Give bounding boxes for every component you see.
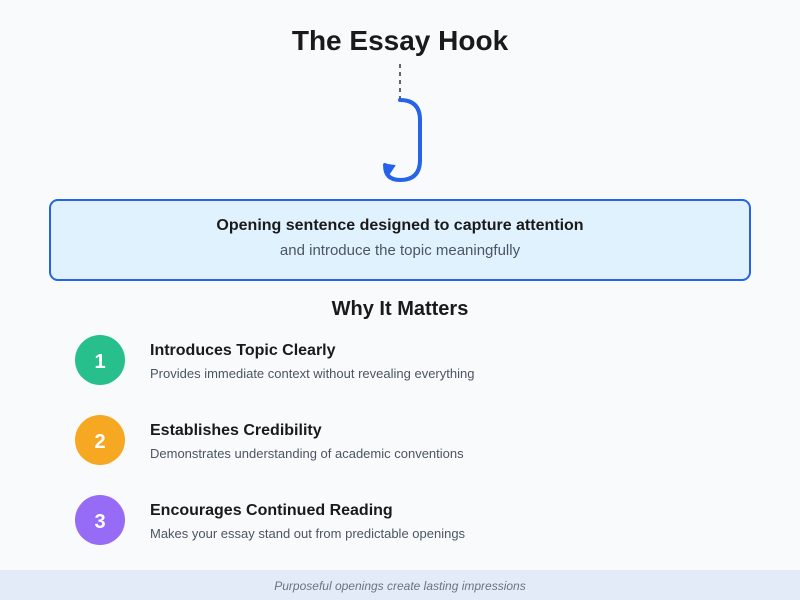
footer bbox=[0, 570, 800, 600]
item 1 description: Provides immediate context without revealing everything bbox=[150, 366, 474, 381]
item 2 description: Demonstrates understanding of academic conventions bbox=[150, 446, 464, 461]
item 1 title: Introduces Topic Clearly bbox=[150, 342, 336, 359]
item 2 title: Establishes Credibility bbox=[150, 422, 322, 439]
badge 3 bbox=[75, 495, 125, 545]
item 3 bbox=[75, 495, 466, 545]
icon: hook bbox=[384, 64, 420, 180]
badge 3: 3 bbox=[94, 511, 106, 533]
definition sub line: and introduce the topic meaningfully bbox=[280, 242, 521, 259]
badge 1: 1 bbox=[94, 351, 106, 373]
badge 2: 2 bbox=[94, 431, 106, 453]
definition box bbox=[50, 200, 750, 280]
item 3 description: Makes your essay stand out from predictable openings bbox=[150, 526, 466, 541]
section heading: Why It Matters bbox=[332, 298, 468, 320]
title: The Essay Hook bbox=[292, 25, 509, 56]
badge 1 bbox=[75, 335, 125, 385]
item 2 bbox=[75, 415, 464, 465]
footer text: Purposeful openings create lasting impressions bbox=[274, 579, 526, 593]
item 1 bbox=[75, 335, 474, 385]
badge 2 bbox=[75, 415, 125, 465]
item 3 title: Encourages Continued Reading bbox=[150, 502, 393, 519]
definition main line: Opening sentence designed to capture attention bbox=[216, 217, 584, 234]
